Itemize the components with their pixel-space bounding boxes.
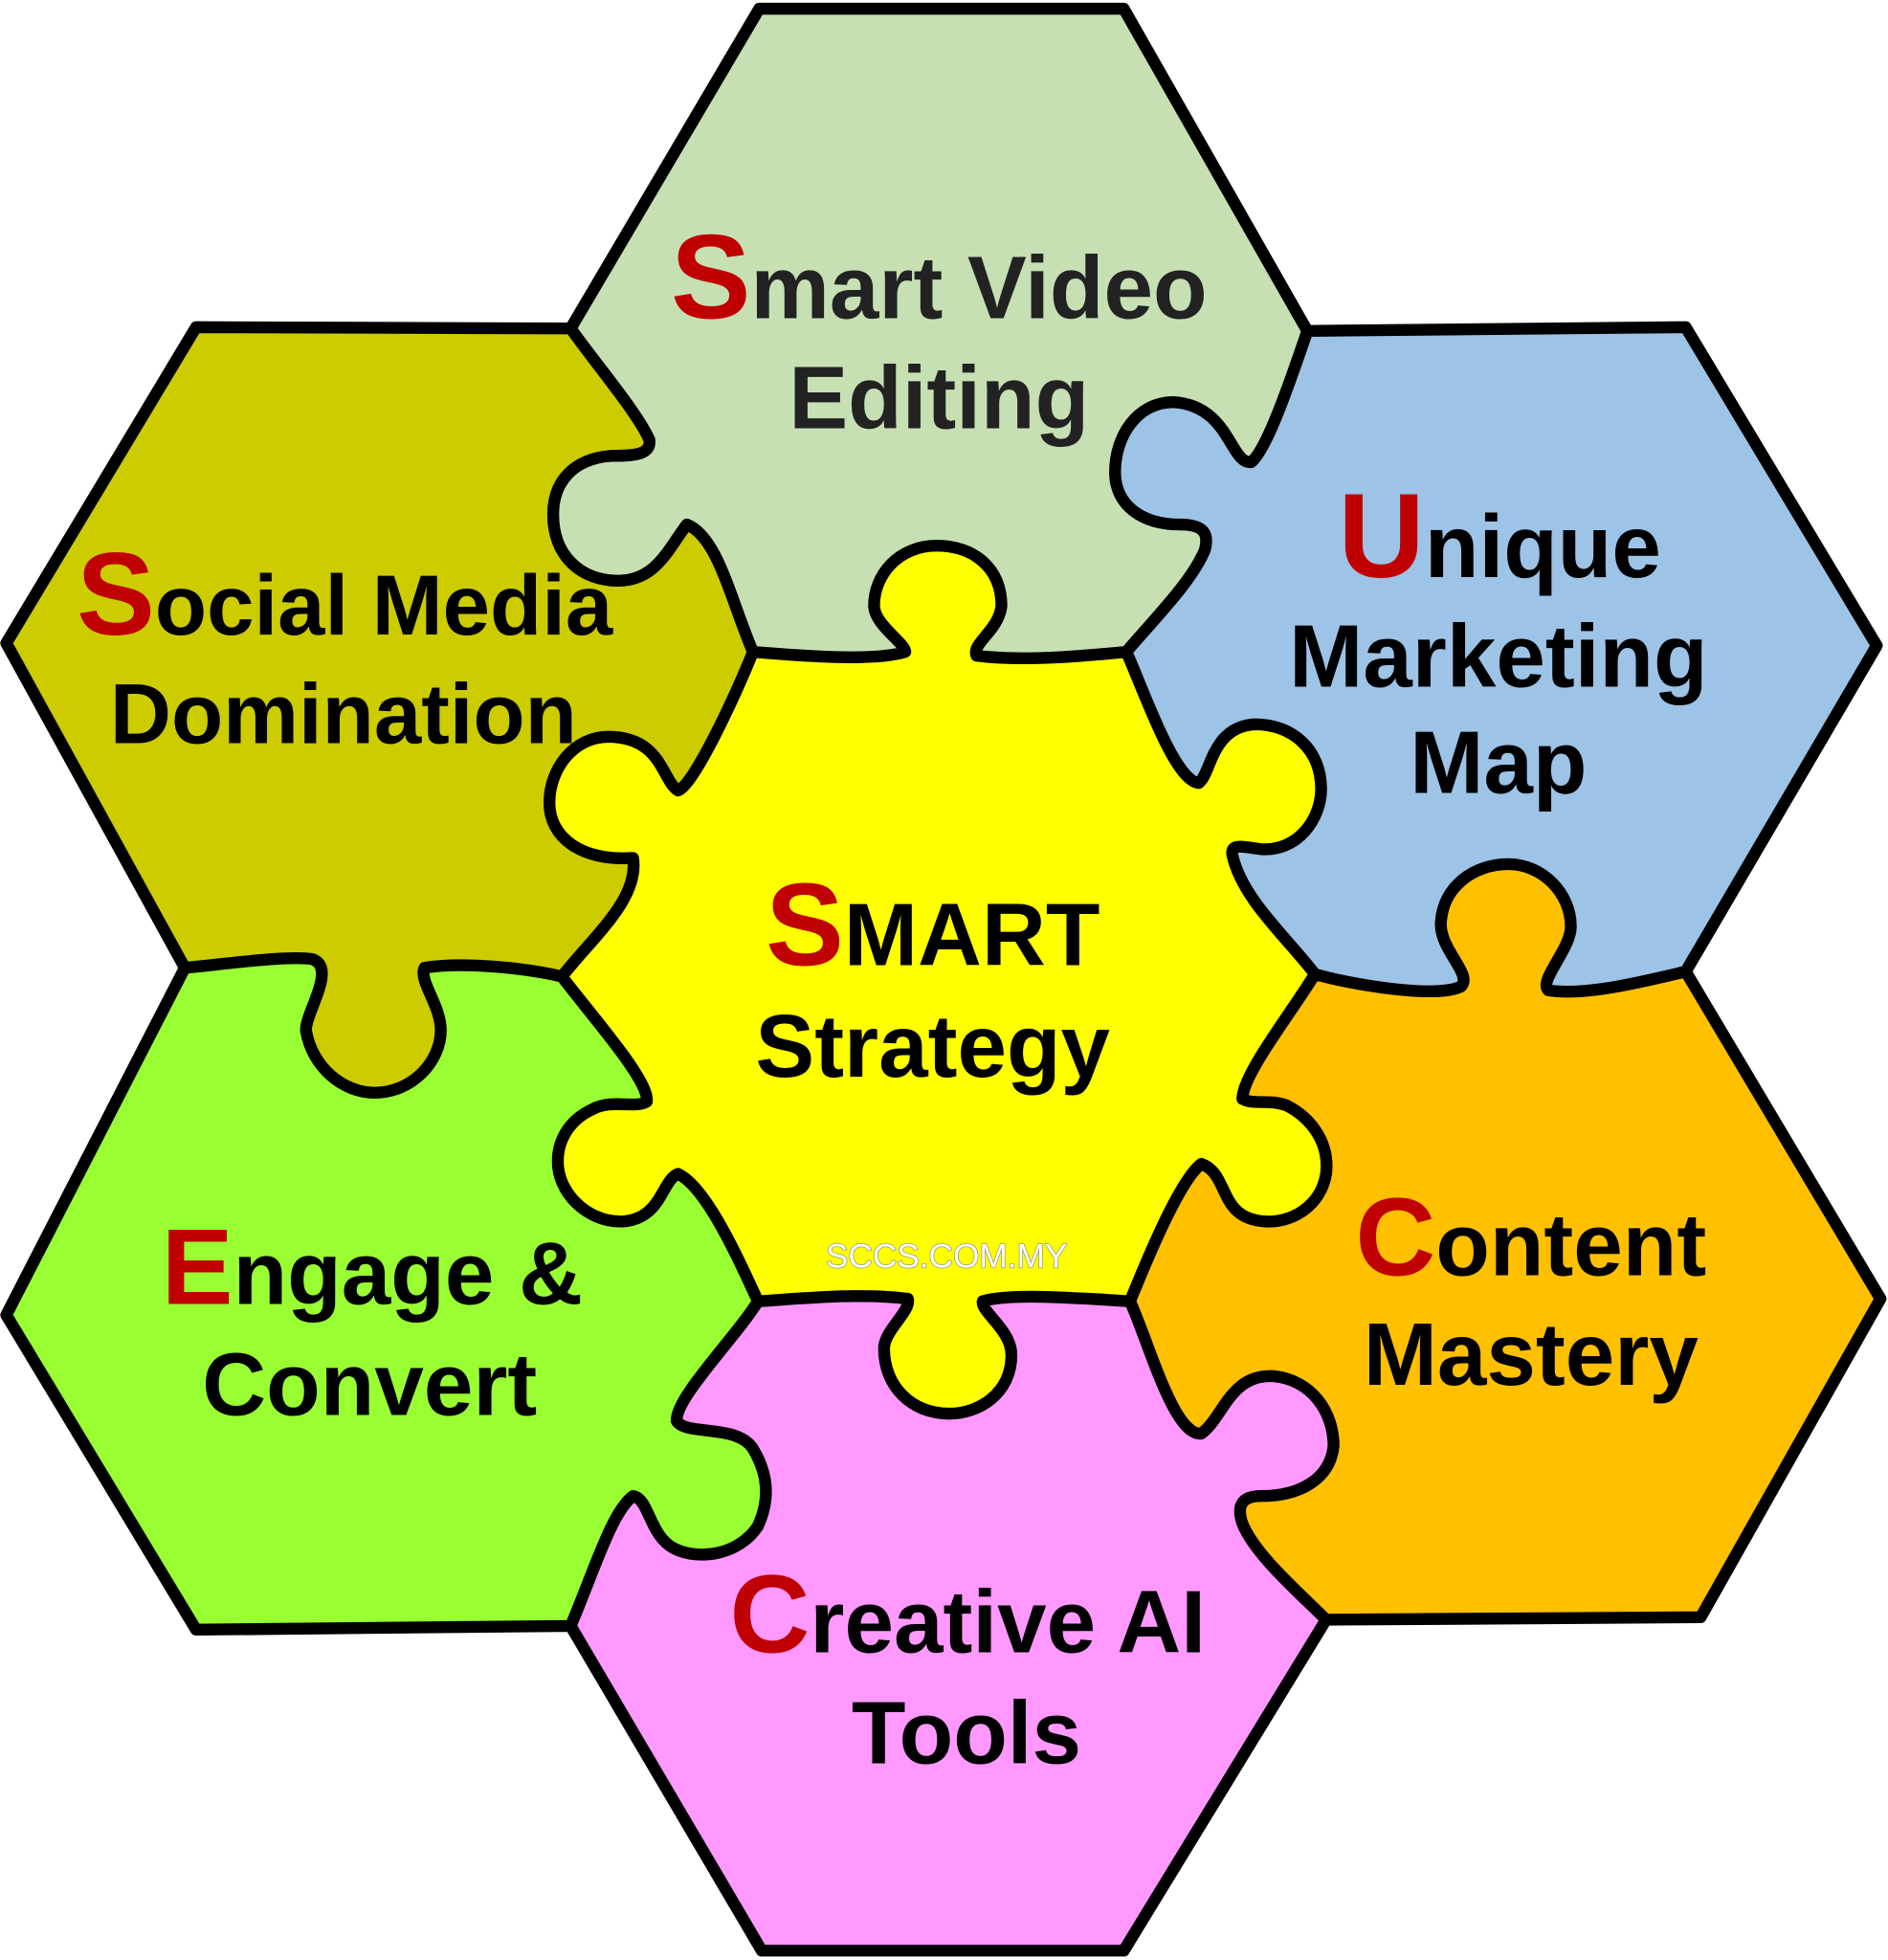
label: smart strategy [755, 859, 1111, 1096]
label: creative ai tools [730, 1551, 1206, 1782]
piece: social media domination [7, 327, 937, 1093]
label: content mastery: Content [1355, 1174, 1706, 1299]
label: engage and convert: Engage & [162, 1206, 583, 1326]
piece: unique marketing map [1115, 327, 1877, 991]
label: unique marketing map [1289, 469, 1708, 813]
piece: central smart strategy [549, 546, 1326, 1414]
label: smart video editing [671, 211, 1208, 448]
label: social media domination: Social Media [77, 528, 613, 659]
label: engage and convert [162, 1206, 583, 1434]
label: social media domination [77, 528, 613, 761]
piece: smart video editing [553, 9, 1373, 874]
label: smart video editing: Smart Video [671, 211, 1208, 345]
label: content mastery [1355, 1174, 1706, 1404]
watermark: SCCS.COM.MY [826, 1237, 1067, 1275]
label: smart strategy: Strategy [755, 996, 1111, 1096]
label: engage and convert: Convert [202, 1334, 537, 1434]
label: content mastery: Mastery [1364, 1304, 1699, 1404]
piece: engage and convert [7, 874, 937, 1630]
label: social media domination: Domination [110, 666, 577, 761]
label: unique marketing map: Unique [1338, 469, 1661, 603]
label: unique marketing map: Map [1410, 713, 1587, 813]
piece: content mastery [937, 864, 1880, 1623]
label: smart strategy: SMART [766, 859, 1099, 991]
label: unique marketing map: Marketing [1289, 607, 1708, 706]
label: creative ai tools: Creative AI [730, 1551, 1206, 1676]
label: smart video editing: Editing [789, 348, 1089, 448]
label: creative ai tools: Tools [852, 1682, 1081, 1782]
piece: creative ai tools [500, 1124, 1334, 1950]
